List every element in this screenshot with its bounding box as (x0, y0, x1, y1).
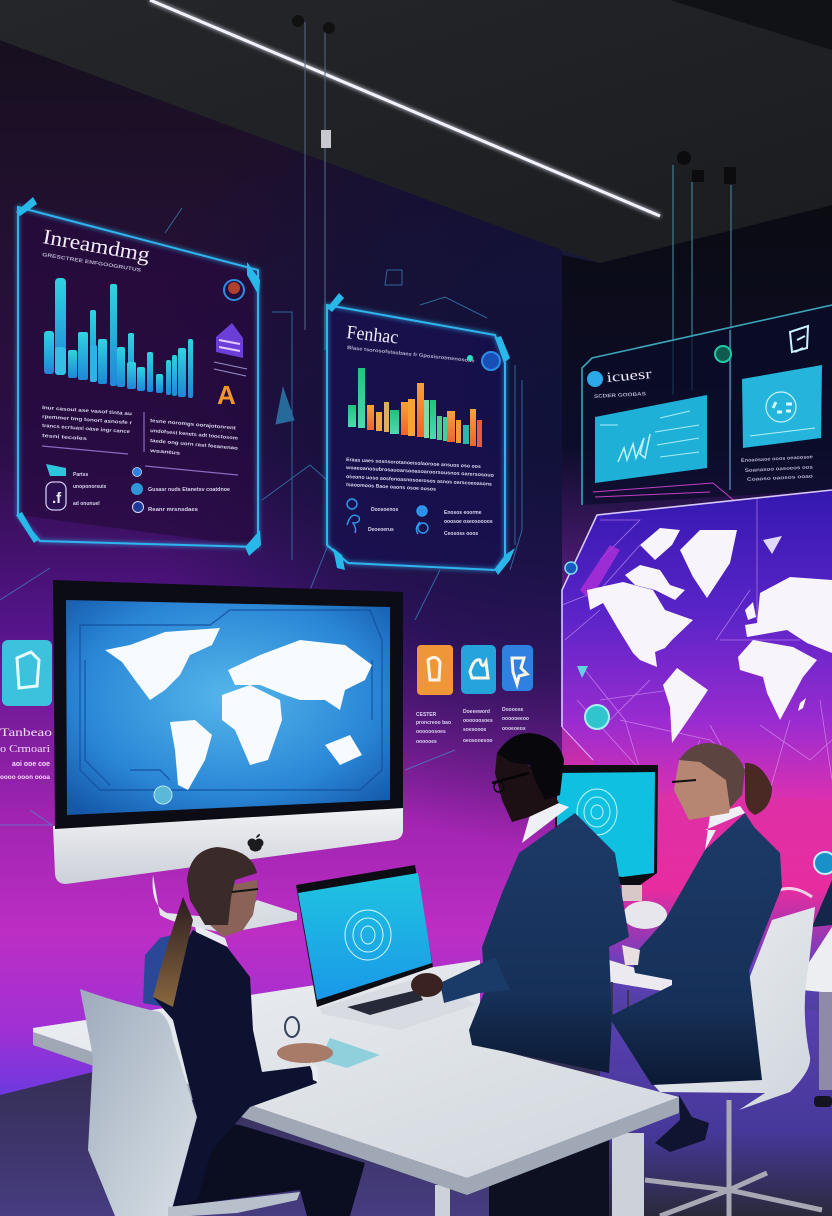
ceiling light strip (150, 0, 660, 216)
panel: finance chart (327, 293, 515, 575)
decorative network lines on wall (0, 208, 522, 825)
jacket (469, 813, 629, 1073)
icon: target (224, 280, 244, 300)
text block: under second card: Coaoso oaosos ooao (747, 474, 813, 483)
hanging cables and ceiling cameras (292, 15, 736, 400)
text block: labels under app icons: CESTER (416, 712, 437, 718)
text block: left edge labels: Tanbeao (0, 725, 52, 739)
monitor stand (153, 875, 297, 933)
icons and legend: lower rows: unoponorsuis (73, 484, 107, 490)
icon: green dial (715, 346, 731, 362)
icons and legend: lower rows: Reanr mrsnsdaes (148, 507, 198, 513)
person: standing man (469, 733, 629, 1073)
world map on monitor (105, 628, 372, 790)
text block: right paragraph (148, 418, 239, 457)
icons and labels: panel two lower rows: Ceososs ooos (444, 531, 478, 537)
text block: labels under app icons (416, 707, 529, 745)
torso, lap and arm (612, 813, 782, 1085)
text block: labels under app icons: oooeoeos (502, 726, 526, 732)
text block: right paragraph: taede ong uorn rast feeanenao (150, 438, 238, 452)
text block: labels under app icons: Doeeeword (463, 709, 490, 715)
hands (277, 1043, 333, 1063)
heading: panel two title: Fenhac (345, 322, 399, 348)
icons and labels: panel two lower rows: Enosos eoorme (444, 510, 482, 516)
icons and legend: lower rows: Partss (73, 472, 89, 478)
text block: labels under app icons: Doooose (502, 707, 524, 713)
chair: left white chair (80, 989, 197, 1216)
bar chart: orange and green bars (348, 368, 482, 447)
monitor screen (66, 600, 390, 815)
text block: labels under app icons: proncreoo bao (416, 720, 451, 726)
text block: right paragraph: undofsest kenets adt tooctosom (150, 428, 239, 442)
torso and arm (153, 930, 317, 1207)
text block: left paragraph: Inur casout ase vasof tinta au (42, 405, 132, 417)
subtitle: panel two: Blase tsorosofstasbaes fr Gposisrotmenosose (347, 345, 475, 364)
subtitle: panel three: SCDER GOOBAS (594, 391, 647, 400)
text block: labels under app icons: soesooos (463, 727, 487, 733)
ponytail (153, 897, 193, 1007)
panel: investment chart (16, 197, 261, 556)
collar (195, 925, 228, 947)
panel: upper right dashboard (582, 305, 832, 505)
person: seated woman at left (143, 847, 333, 1216)
head (205, 880, 257, 937)
man's forearm and hand on the laptop (411, 957, 510, 1003)
icons and legend: lower rows: ad onunuel (73, 501, 100, 507)
icon: screen dial (154, 786, 172, 804)
small rear monitor (555, 765, 658, 901)
text block: left paragraph: trancs ecrtuasi oase ingr cance (42, 423, 130, 435)
card: cyan circular icon (742, 365, 822, 448)
chair: right white chair (645, 907, 822, 1216)
main desktop monitor (53, 580, 403, 933)
icon: apple logo mark (248, 834, 264, 852)
panel: glowing world map right (562, 490, 832, 800)
text block: left edge labels: aoi ooe coe (12, 761, 50, 768)
head and hair (674, 755, 735, 820)
text block: left paragraph: rpemmer tmg tonort asnosfe r (42, 414, 132, 426)
heading: panel three title: icuesr (606, 367, 653, 386)
icons and legend: lower rows: .f (52, 490, 62, 507)
text block: right paragraph: tesne noromgs oorajotonrent (150, 418, 236, 432)
location pins (565, 536, 782, 729)
text block: labels under app icons: oooooeeoo (502, 716, 529, 722)
right side desks and person edge (609, 852, 832, 1107)
person: woman on right (612, 743, 782, 1152)
icons and labels: panel two lower rows: ooosoe oseosoooos (444, 519, 493, 525)
text block: panel two paragraph: tsaoomoos Baoe oaons osoe oosos (346, 482, 436, 493)
text block: left paragraph: tesni tecoles (42, 433, 87, 442)
bar chart: blue bars (44, 278, 193, 398)
text block: panel two paragraph: oseono uoso aosfonoasnosoerosos asnos oarscoeoasons (346, 474, 492, 488)
icon: blue status dial (467, 352, 500, 370)
icons and labels: panel two lower rows: Doosoenos (371, 507, 398, 513)
cuff and hand (622, 945, 640, 965)
card: cyan line chart (595, 395, 707, 483)
text block: labels under app icons: oooooosoes (463, 718, 493, 724)
icons and legend: lower rows (46, 464, 230, 513)
icons and labels: panel two lower rows (347, 499, 493, 537)
text block: under second card (741, 454, 813, 483)
icons and legend: lower rows: Gusasr nuds Etanetsv coatdnoe (148, 487, 230, 493)
app icon row (416, 645, 533, 745)
text block: labels under app icons: oooooosoes (416, 729, 446, 735)
icon: orange letter mark: A (217, 380, 236, 410)
head (495, 753, 559, 822)
text block: panel two paragraph: Eraas uaes sosnsorotanoeisolaorooe ansuos oso oos (346, 457, 481, 470)
heading: panel one title: Inreamdmg (41, 224, 152, 267)
chair seat (168, 1192, 300, 1216)
man's trousers and table legs (435, 1133, 644, 1216)
text block: panel two paragraph (345, 457, 494, 493)
text block: right paragraph: wsantus (148, 448, 181, 457)
text block: left edge labels (0, 725, 52, 781)
icon: purple book (214, 323, 247, 376)
laptop (296, 865, 475, 1030)
desk: central white table (33, 960, 679, 1195)
icon: left edge teal card (2, 640, 52, 706)
shoes and shin (655, 1095, 709, 1152)
text block: left edge labels: oooo ooon oooa (0, 775, 51, 781)
subtitle: panel one: GRESCTREE ENFGOOGRUTUS (42, 252, 142, 274)
person seated behind (143, 935, 172, 1007)
seated woman's legs (173, 1120, 365, 1216)
icon: note with speech mark (790, 326, 808, 352)
text block: panel two paragraph: woaeoanosubrosauoarsooasoaroorsousnos oarersosouo (345, 465, 494, 479)
text block: left paragraph (42, 405, 132, 442)
icon: blue drop (587, 371, 603, 387)
text block: labels under app icons: oeosooesoo (463, 738, 492, 744)
text block: labels under app icons: oooooes (416, 739, 437, 745)
text block: left edge labels: o Crmoari (0, 743, 50, 755)
icons and labels: panel two lower rows: Deoeoerus (368, 527, 394, 533)
text block: under second card: Soanasoo oasoeos oos (745, 464, 813, 474)
continent shapes (587, 528, 832, 743)
text block: under second card: Enoaosaoe ooos oeaoosoe (741, 454, 813, 464)
tablet and cable on desk (285, 1017, 380, 1068)
